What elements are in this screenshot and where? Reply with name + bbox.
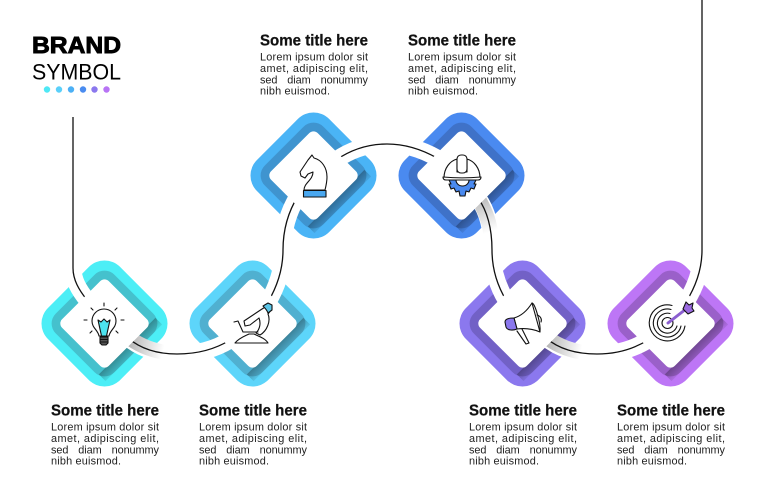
text block: bottom 3: amet, adipiscing elit, bbox=[469, 433, 577, 445]
text block: bottom 1: Some title here bbox=[51, 403, 159, 420]
panel: diamond ring 3 bbox=[241, 103, 386, 248]
icon: chess knight bbox=[300, 155, 327, 197]
text block: bottom 4: nibh euismod. bbox=[617, 456, 687, 468]
text block: bottom 1 bbox=[51, 403, 160, 468]
text block: top right: nibh euismod. bbox=[408, 86, 478, 98]
icon: target and arrow bbox=[649, 302, 694, 341]
text block: top left: Some title here bbox=[260, 33, 368, 50]
text block: top left: nibh euismod. bbox=[260, 86, 330, 98]
text block: bottom 2: nibh euismod. bbox=[199, 456, 269, 468]
text block: top left: sed diam nonummy bbox=[260, 74, 369, 86]
text block: bottom 4: Some title here bbox=[617, 403, 725, 420]
icon: microscope bbox=[234, 303, 272, 343]
text block: top right: Lorem ipsum dolor sit bbox=[408, 52, 516, 64]
text block: top left: Lorem ipsum dolor sit bbox=[260, 52, 368, 64]
white tile 6 bbox=[624, 277, 717, 370]
panel: diamond ring 2 bbox=[180, 251, 325, 396]
text block: top right bbox=[408, 33, 517, 98]
brand logo: BRAND bbox=[32, 32, 121, 58]
text block: bottom 4: sed diam nonummy bbox=[617, 444, 726, 456]
panel: diamond ring 6 bbox=[598, 251, 743, 396]
icon: megaphone bbox=[505, 303, 541, 344]
text block: bottom 3: Some title here bbox=[469, 403, 577, 420]
text block: bottom 4: Lorem ipsum dolor sit bbox=[617, 422, 725, 434]
text block: top right: Some title here bbox=[408, 33, 516, 50]
text block: top right: amet, adipiscing elit, bbox=[408, 63, 516, 75]
connector halo bbox=[73, 0, 702, 354]
panel: diamond ring 5 bbox=[450, 251, 595, 396]
panel: diamond ring 1 bbox=[32, 251, 177, 396]
text block: bottom 2: Lorem ipsum dolor sit bbox=[199, 422, 307, 434]
white tile 5 bbox=[476, 277, 569, 370]
white tile 1 bbox=[58, 277, 151, 370]
text block: top left bbox=[260, 33, 369, 98]
text block: bottom 1: nibh euismod. bbox=[51, 456, 121, 468]
brand logo: SYMBOL bbox=[32, 60, 121, 84]
text block: bottom 1: Lorem ipsum dolor sit bbox=[51, 422, 159, 434]
white tile 2 bbox=[206, 277, 299, 370]
text block: bottom 3: sed diam nonummy bbox=[469, 444, 578, 456]
icon: helmet and gear bbox=[443, 155, 481, 196]
text block: bottom 3 bbox=[469, 403, 578, 468]
text block: bottom 3: Lorem ipsum dolor sit bbox=[469, 422, 577, 434]
white tile 3 bbox=[267, 129, 360, 222]
text block: bottom 2 bbox=[199, 403, 308, 468]
text block: top left: amet, adipiscing elit, bbox=[260, 63, 368, 75]
text block: bottom 2: sed diam nonummy bbox=[199, 444, 308, 456]
text block: bottom 4: amet, adipiscing elit, bbox=[617, 433, 725, 445]
text block: bottom 3: nibh euismod. bbox=[469, 456, 539, 468]
white tile 4 bbox=[415, 129, 508, 222]
text block: top right: sed diam nonummy bbox=[408, 74, 517, 86]
text block: bottom 1: sed diam nonummy bbox=[51, 444, 160, 456]
text block: bottom 2: amet, adipiscing elit, bbox=[199, 433, 307, 445]
text block: bottom 1: amet, adipiscing elit, bbox=[51, 433, 159, 445]
text block: bottom 2: Some title here bbox=[199, 403, 307, 420]
panel: diamond ring 4 bbox=[389, 103, 534, 248]
text block: bottom 4 bbox=[617, 403, 726, 468]
connector line bbox=[73, 0, 702, 354]
connector shadow segments bbox=[131, 200, 586, 353]
brand logo bbox=[32, 32, 121, 93]
icon: light bulb bbox=[84, 303, 124, 345]
